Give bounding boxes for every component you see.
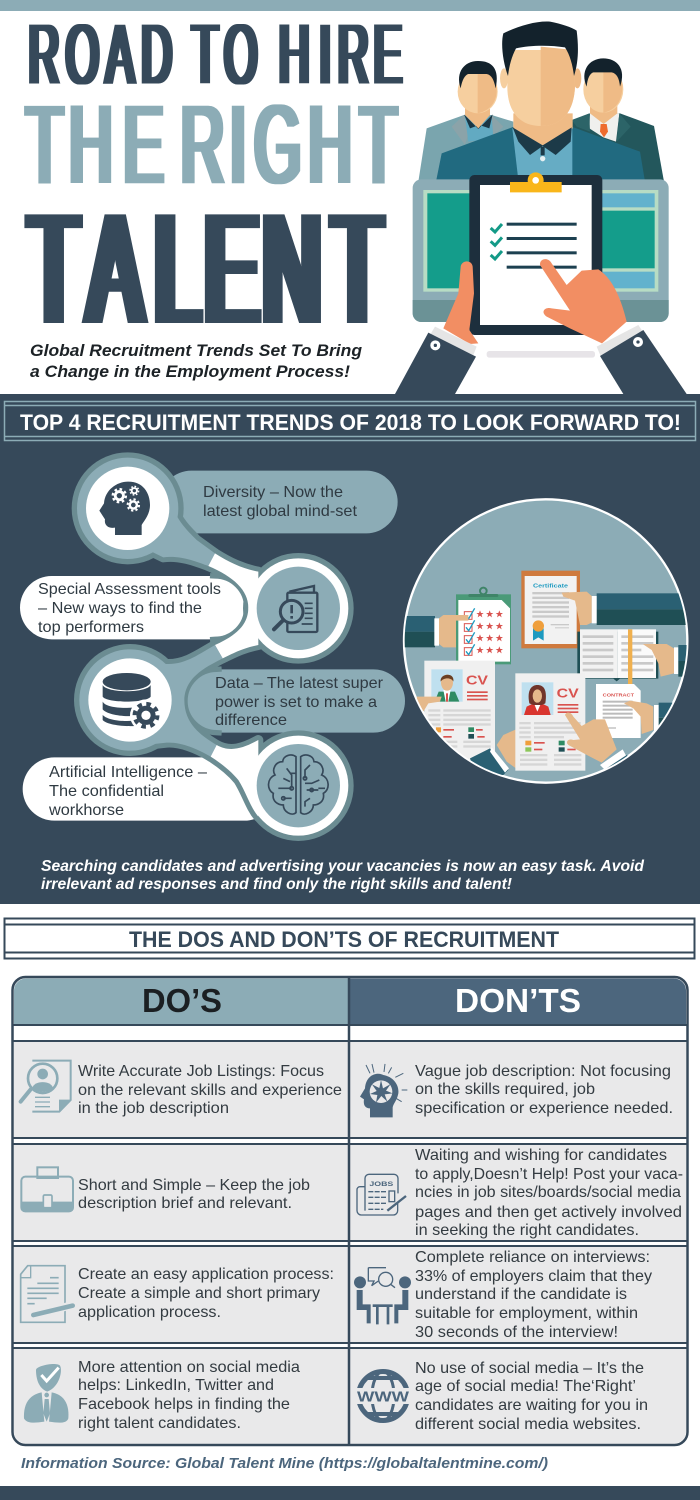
source note: Information Source: Global Talent Mine (https://globaltalentmine.com/) [21,1455,548,1472]
pill text: artificial intelligence [48,764,207,819]
pill: assessment background [20,576,247,639]
row 2 do [21,1167,310,1212]
pill text: data [215,675,384,729]
certificate: Certificate [533,583,568,589]
icon: jobs newspaper [357,1174,406,1215]
row 4 don't: different social media websites. [415,1416,641,1433]
pill text: diversity [203,484,358,520]
pill text: diversity: Diversity – Now the [203,484,343,501]
node 4 [248,736,348,836]
row 1 do [21,1061,342,1117]
icon: briefcase [21,1167,74,1212]
connector ring [100,507,258,817]
clipboard [469,172,602,335]
row 4 do: helps: LinkedIn, Twitter and [78,1377,274,1394]
laptop [413,179,669,322]
row 3 don't: Complete reliance on interviews: [415,1249,650,1266]
pill text: diversity: latest global mind-set [203,503,358,520]
row 2 don't: ncies in job sites/boards/social media [415,1184,681,1201]
icon: interview meeting [354,1268,411,1324]
row 4 don't [355,1360,648,1433]
intro statement: irrelevant ad responses and find only the right skills and talent! [41,876,513,893]
CV left: CV [466,673,488,688]
row 3 do: application process. [78,1304,221,1321]
pill text: data: power is set to make a [215,694,377,711]
certificate [521,571,580,648]
banner: dos and don'ts [4,918,695,958]
sleeves [395,325,687,394]
pill: data background [185,669,405,733]
icon: jobs newspaper: JOBS [369,1181,394,1188]
row 3 do [21,1266,334,1322]
pill text: data: difference [215,712,287,729]
row backgrounds [14,1042,686,1444]
right arm and hand [562,592,687,625]
header: dos: DO’S [142,982,222,1019]
illustration: recruiters with clipboard [395,22,687,394]
pill text: assessment [38,581,221,636]
table panel [12,977,688,1445]
open book [577,629,688,685]
title: ROAD TO HIRE [29,7,402,102]
icon: head with gears [99,482,150,535]
illustration: CV circle [403,499,688,783]
lower sleeve and hand [470,728,518,775]
subtitle: a Change in the Employment Process! [30,362,350,381]
row 3 don't: 33% of employers claim that they [415,1268,652,1285]
icon: application form [21,1266,73,1322]
icon: head with burst [360,1064,407,1117]
node rings [72,452,354,841]
pill text: assessment: – New ways to find the [38,600,202,617]
header: dos [14,978,349,1024]
row 1 do: in the job description [78,1100,229,1117]
connector bands [100,507,258,817]
pointing hand [565,712,628,769]
row 1 don't: specification or experience needed. [415,1100,673,1117]
icon: database with gear [103,673,162,731]
row 3 don't: understand if the candidate is [415,1286,627,1303]
pill text: artificial intelligence: workhorse [48,802,124,819]
right candidate [572,58,664,182]
CV right [515,673,585,771]
row 4 do [24,1359,300,1432]
left candidate [418,61,513,182]
banner: top 4 trends: TOP 4 RECRUITMENT TRENDS OF 2018 TO LOOK FORWARD TO! [20,410,681,435]
row 3 do: Create an easy application process: [78,1266,334,1283]
row 3 don't: 30 seconds of the interview! [415,1324,618,1341]
row 2 don't: pages and then get actively involved [415,1204,682,1221]
row 4 don't: candidates are waiting for you in [415,1397,648,1414]
pill text: data: Data – The latest super [215,675,384,692]
title: TALENT [29,183,382,356]
CV left [417,661,495,761]
pill: diversity background [160,471,398,533]
row 4 do: right talent candidates. [78,1415,241,1432]
row 3 don't [354,1249,652,1341]
intro statement [41,858,645,893]
banner: top 4 trends [4,402,696,440]
row 4 do: Facebook helps in finding the [78,1396,290,1413]
banner: dos and don'ts: THE DOS AND DON’TS OF RECRUITMENT [129,927,560,952]
icon: verified person [24,1364,68,1423]
left arm and hand [404,615,456,648]
row 4 don't: age of social media! The‘Right’ [415,1378,636,1395]
pill text: artificial intelligence: The confidential [49,783,164,800]
row 2 do: Short and Simple – Keep the job [78,1177,310,1194]
contract: CONTRACT [603,693,634,699]
row 2 don't [357,1147,683,1239]
CV right: CV [557,685,579,700]
icon: www globe: WWW [357,1388,410,1406]
desk bar [487,351,595,358]
node 2 [248,558,348,658]
row 2 do: description brief and relevant. [78,1195,292,1212]
pill text: assessment: Special Assessment tools [38,581,221,598]
node 1 [77,458,178,559]
icon: document with magnifier [274,586,317,632]
row 1 don't: on the skills required, job [415,1081,595,1098]
row 3 don't: suitable for employment, within [415,1305,638,1322]
row 2 don't: to apply,Doesn’t Help! Post your vaca- [415,1166,683,1183]
header: don'ts [349,978,686,1024]
header: don'ts: DON’TS [455,982,581,1019]
row 4 do: More attention on social media [78,1359,300,1376]
pill: AI background [23,757,276,821]
icon: www globe [355,1372,411,1420]
title: THE RIGHT [26,83,397,206]
contract [596,684,675,738]
row 1 don't: Vague job description: Not focusing [415,1063,671,1080]
row 2 don't: in seeking the right candidates. [415,1222,639,1239]
top bar [0,0,700,11]
row 4 don't: No use of social media – It’s the [415,1360,644,1377]
row 1 do: Write Accurate Job Listings: Focus [78,1063,324,1080]
trends flow diagram [20,452,405,841]
row 1 don't [360,1063,673,1117]
main candidate [436,22,645,182]
rating clipboard [456,586,511,664]
intro statement: Searching candidates and advertising your vacancies is now an easy task. Avoid [41,858,645,875]
hands [443,259,627,344]
subtitle [30,341,363,381]
panel: dark trends section [0,394,700,904]
node 3 [79,649,181,751]
title [26,7,402,356]
pill text: artificial intelligence: Artificial Intelligence – [49,764,207,781]
row 1 do: on the relevant skills and experience [78,1082,342,1099]
icon: circuit brain [269,755,328,814]
pill text: assessment: top performers [38,619,144,636]
subtitle: Global Recruitment Trends Set To Bring [30,341,363,360]
icon: resume search [21,1061,71,1112]
row 3 do: Create a simple and short primary [78,1285,320,1302]
bottom bar [0,1486,700,1500]
row 2 don't: Waiting and wishing for candidates [415,1147,667,1164]
